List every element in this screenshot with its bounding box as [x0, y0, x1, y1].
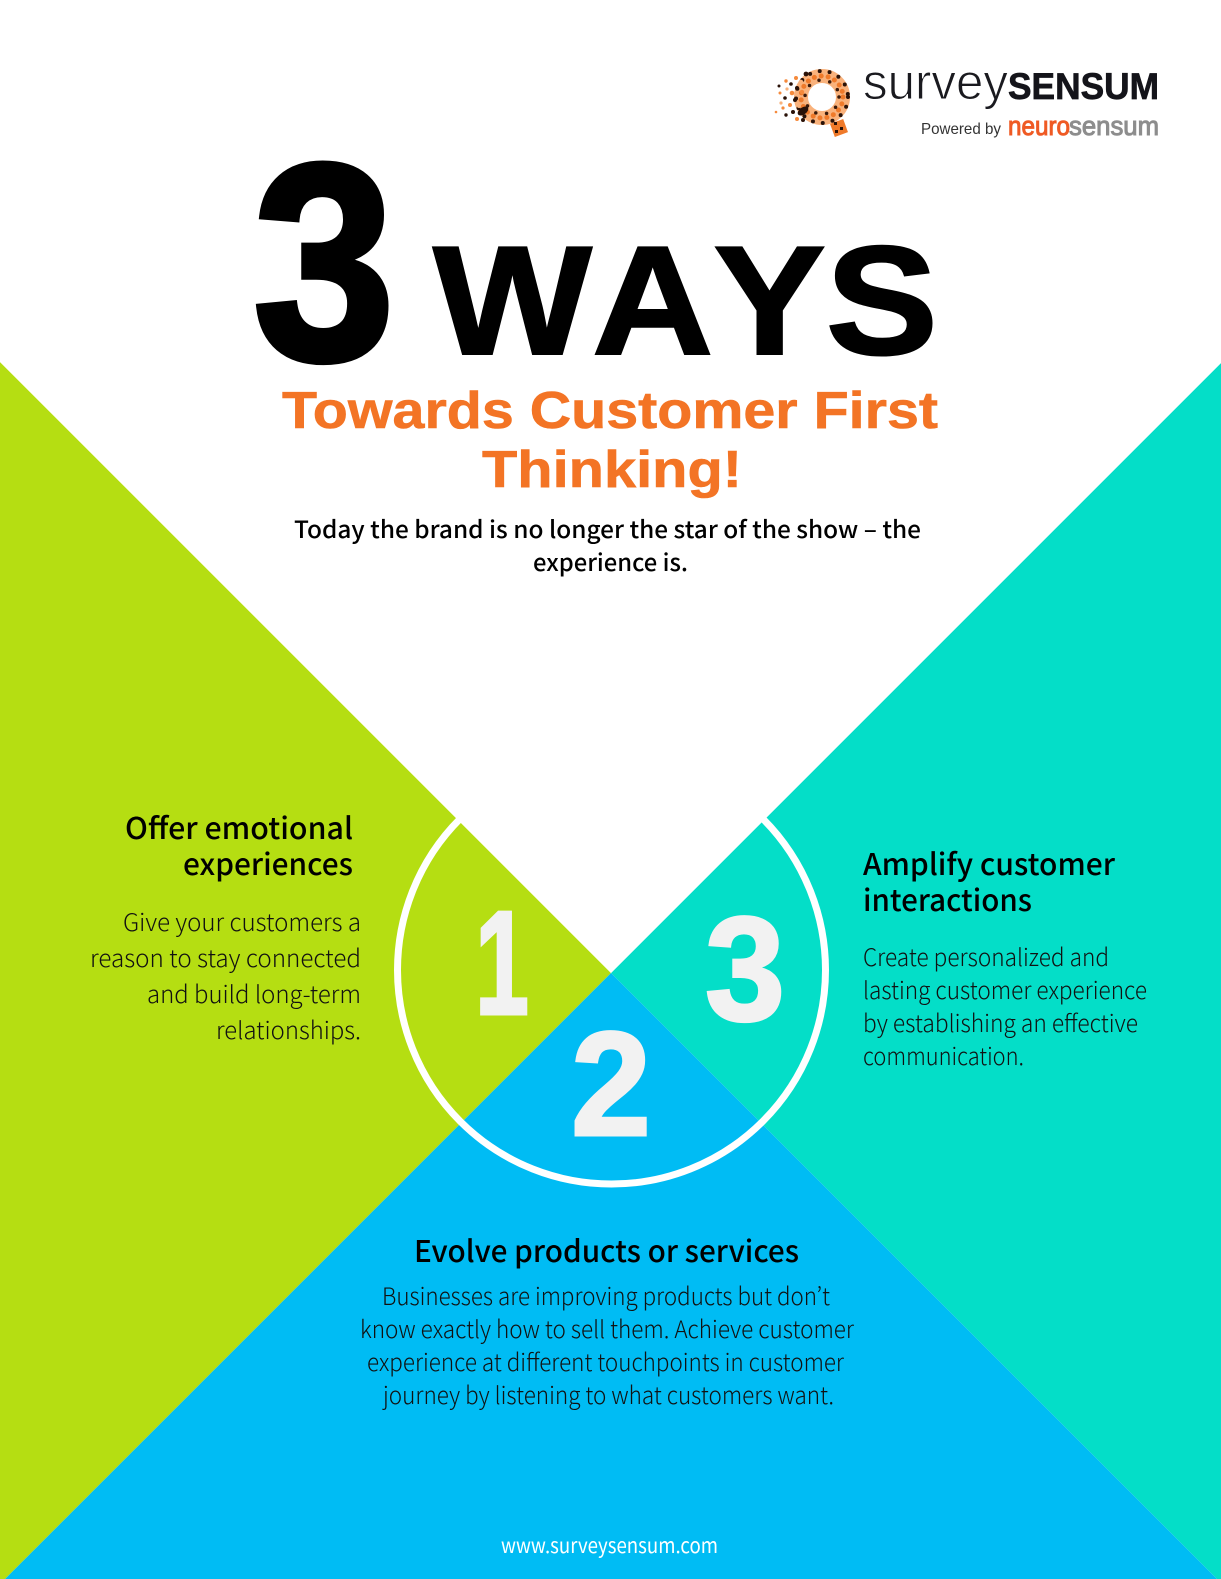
body text [360, 1277, 854, 1411]
section: offer emotional experiences [90, 804, 361, 1046]
heading: Evolve products or services [414, 1227, 799, 1271]
section: evolve products or services [360, 1227, 854, 1411]
heading [125, 804, 353, 884]
circle outline [398, 756, 826, 1184]
panel: green triangle [0, 362, 611, 1579]
website url: www.surveysensum.com [501, 1530, 718, 1560]
subtitle [282, 382, 938, 499]
body text: experience at different touchpoints in customer [367, 1343, 844, 1378]
logo: sensum [1069, 111, 1159, 141]
body text: and build long-term [147, 975, 361, 1010]
subtitle: Towards Customer First [282, 382, 938, 440]
intro text: Today the brand is no longer the star of the show – the [294, 510, 921, 545]
intro text: experience is. [533, 543, 688, 578]
panel: white top area [0, 0, 1221, 973]
heading: experiences [183, 840, 353, 884]
heading: Amplify customer [863, 840, 1116, 884]
intro text [294, 510, 921, 578]
panel: teal triangle [611, 363, 1221, 1579]
body text: relationships. [216, 1011, 361, 1046]
logo: SENSUM [1008, 66, 1159, 107]
heading: interactions [863, 876, 1032, 920]
title: 3 WAYS: 3 [253, 107, 395, 419]
number 1: 1 [475, 881, 529, 1046]
heading [863, 840, 1116, 920]
heading: Offer emotional [125, 804, 353, 848]
subtitle: Thinking! [482, 441, 742, 499]
body text: journey by listening to what customers want. [382, 1376, 834, 1411]
body text: communication. [863, 1037, 1024, 1072]
powered by: Powered by [921, 121, 1001, 138]
logo [775, 54, 1159, 141]
body text [863, 938, 1147, 1072]
body text: lasting customer experience [863, 971, 1147, 1006]
title: 3 WAYS: WAYS [433, 214, 938, 387]
body text: know exactly how to sell them. Achieve customer [360, 1310, 854, 1345]
body text: Create personalized and [863, 938, 1109, 973]
body text: Businesses are improving products but don’t [382, 1277, 831, 1312]
body text [90, 903, 361, 1046]
logo: neuro [1008, 111, 1070, 141]
icon: magnifier dots [775, 71, 848, 137]
body text: reason to stay connected [90, 939, 361, 974]
body text: by establishing an effective [863, 1004, 1138, 1039]
logo wordmark: survey [863, 54, 1008, 110]
body text: Give your customers a [123, 903, 361, 938]
number 2: 2 [571, 1002, 651, 1167]
title: 3 WAYS [253, 107, 938, 419]
section: amplify customer interactions [863, 840, 1147, 1072]
number 3: 3 [705, 887, 785, 1052]
panel: blue triangle [5, 973, 1217, 1579]
